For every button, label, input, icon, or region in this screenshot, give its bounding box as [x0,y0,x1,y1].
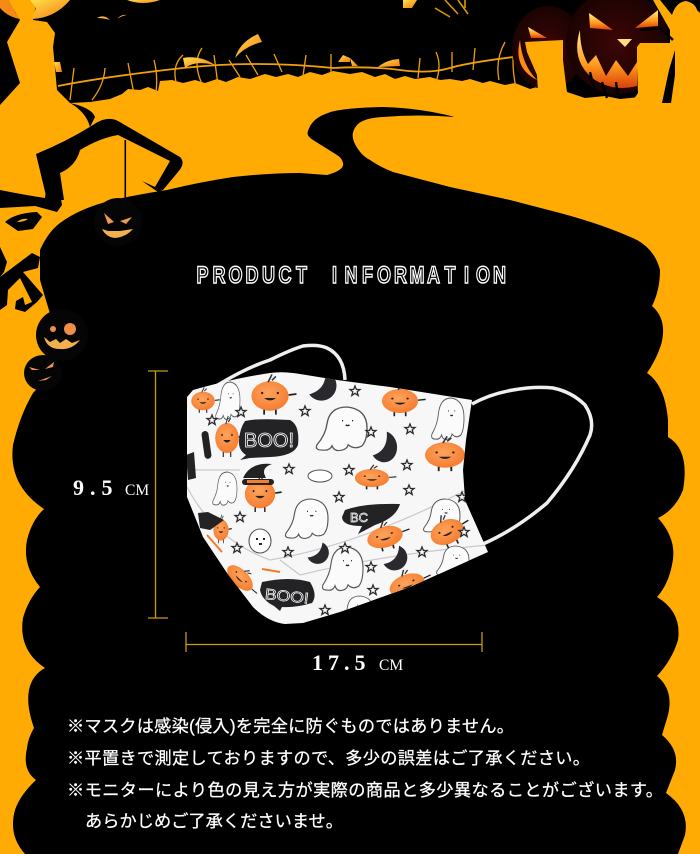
speech bubble: boo middle: BC [350,510,368,525]
note line 4: あらかじめご了承くださいませ。 [85,811,343,831]
moons print [201,370,408,571]
left curl [5,212,42,231]
heading: product information: PRODUCT INFORMATION [196,263,506,289]
right ear loop [472,387,592,544]
speech bubble: boo bottom: BOO! [264,586,310,607]
width label: CM [379,657,403,674]
top night scene [0,0,700,112]
speech bubble: boo middle [342,504,400,534]
flying ribbons [54,0,417,72]
speech bubble: boo bottom [260,579,315,611]
hanging pumpkin bottom [24,355,62,391]
twigs at top [435,0,468,17]
mask fabric [187,372,488,624]
lower curled branch [0,253,43,312]
notes text block [67,716,663,831]
small hook [70,103,95,127]
orange silhouette right post [525,40,568,100]
witch hat [242,464,274,485]
fence rail and posts [58,38,530,100]
width label: 17.5 [312,650,370,675]
height dimension line [148,371,168,618]
note line 1: ※マスクは感染(侵入)を完全に防ぐものではありません。 [67,716,514,736]
note line 2: ※平置きで測定しておりますので、多少の誤差はご了承ください。 [67,748,590,768]
speech bubble: boo top: BOO! [244,430,294,452]
width dimension line [186,632,482,652]
note line 3: ※モニターにより色の見え方が実際の商品と多少異なることがございます。 [67,780,663,800]
left branch band [0,180,62,212]
speech bubble: boo top [239,419,298,460]
top-left glowing crescent [30,0,70,19]
back jack-o-lantern [512,6,584,90]
mask pleats [187,470,488,575]
stars print [207,386,469,614]
hanging pumpkin middle [36,309,88,361]
face mask [187,372,488,624]
height label: CM [125,482,149,499]
orange silhouette left figure [0,0,90,112]
speech bubble: small folded [186,452,224,530]
bare tree [0,103,183,312]
height label: 9.5 [73,475,118,500]
orange trim at pleat [207,535,280,572]
pumpkins print [191,374,475,604]
orange silhouette right figure [625,0,700,112]
black night sky with grass edge [0,0,700,110]
ghosts print [213,382,469,625]
upper branch [36,119,183,200]
left ear loop [213,345,345,388]
front jack-o-lantern [566,0,668,98]
hanging pumpkin top [94,198,142,246]
hanging thread [124,140,126,200]
